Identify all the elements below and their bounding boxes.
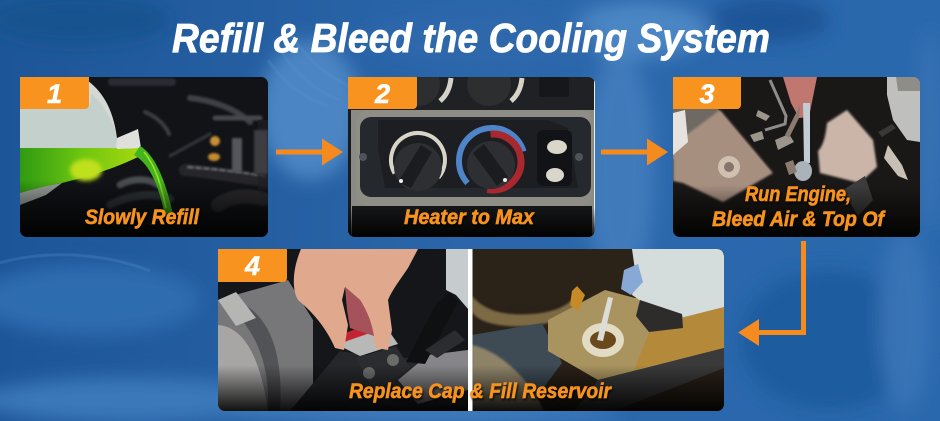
title: Refill & Bleed the Cooling System: [172, 15, 770, 61]
photo: hand removing radiator cap: [218, 249, 468, 411]
arrow: step 2 to 3: [601, 138, 668, 166]
step 3 label: Run Engine,: [745, 183, 851, 206]
panel: step 3 run engine: [673, 77, 920, 237]
fan dial: [388, 130, 447, 179]
temperature dial: [456, 125, 526, 186]
photo: heater control panel: [348, 62, 595, 237]
step 2 number badge: [348, 77, 417, 109]
step 2 label: Heater to Max: [404, 206, 535, 229]
panel: step 1 slowly refill: [20, 77, 268, 237]
panel: step 4 replace cap and fill reservoir: [218, 249, 724, 411]
panel: step 2 heater to max: [348, 62, 595, 237]
lower trim: [352, 206, 592, 237]
step 3 label: [712, 183, 886, 231]
photo: blurred engine and coolant jug: [20, 77, 268, 216]
step 1 label: Slowly Refill: [85, 206, 200, 229]
step 1 number badge: [20, 77, 89, 109]
photo: pouring coolant into reservoir: [472, 249, 724, 411]
step 2 number badge: 2: [374, 79, 390, 109]
step 3 label: Bleed Air & Top Of: [712, 208, 886, 231]
step 3 number badge: [673, 77, 741, 109]
white divider between photos: [468, 249, 472, 411]
fan and auto buttons: [537, 130, 572, 186]
step 4 number badge: 4: [244, 251, 260, 281]
arrow: step 3 to 4: [738, 241, 806, 346]
arrow: step 1 to 2: [276, 138, 343, 166]
step 4 number badge: [218, 249, 287, 282]
step 3 number badge: 3: [699, 79, 715, 109]
photo: engine with wrench: [673, 77, 920, 216]
step 1 number badge: 1: [47, 79, 62, 109]
step 4 label: Replace Cap & Fill Reservoir: [349, 380, 613, 403]
coolant stream: [134, 146, 173, 216]
coolant jug: [20, 82, 117, 148]
